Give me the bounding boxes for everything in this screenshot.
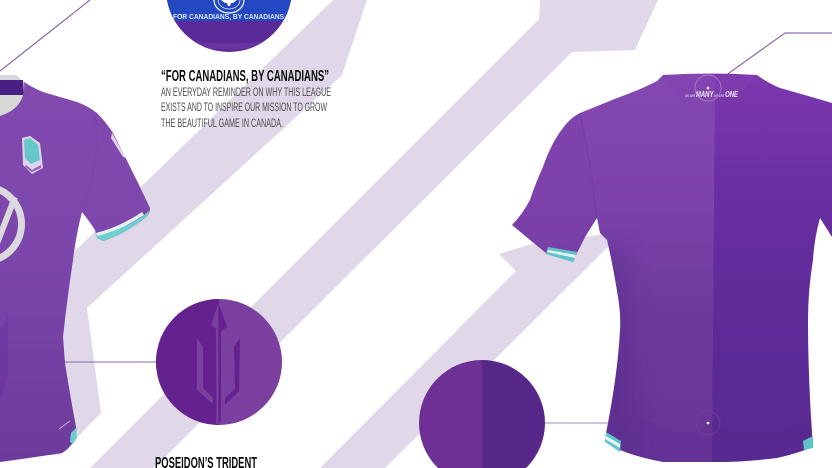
purple fabric [167,0,291,52]
left hem cuff [605,432,621,452]
left half [500,70,716,465]
background stripe: centre trident shaft [90,0,658,468]
body copy: EXISTS AND TO INSPIRE OUR MISSION TO GROW [161,100,327,114]
circle darker half [482,360,545,468]
left sleeve cuff white band [96,212,144,236]
sleeve seam [82,114,97,212]
right half [712,70,832,465]
sleeve stripe mark [111,133,126,158]
hem reflective mark [59,421,70,429]
collar yoke [663,75,757,97]
right hem cuff [803,436,813,450]
circle base [156,299,282,425]
left hem cuff [70,428,77,444]
sleeve shading [512,162,597,252]
maple leaf emblem [214,0,244,13]
trident icon left half [197,303,218,424]
text block: for Canadians [161,68,331,130]
hem shading [620,420,815,465]
background stripe: right trident tine [320,232,620,468]
background stripe: left trident tine [0,0,367,455]
stitched fabric band [194,42,264,50]
callout line: split colours [545,422,665,424]
collar inside [0,75,24,118]
blue label [167,0,291,21]
body copy: AN EVERYDAY REMINDER ON WHY THIS LEAGUE [161,85,331,99]
left jersey [0,75,150,462]
callout line: top left [0,0,90,71]
body copy: THE BEAUTIFUL GAME IN CANADA. [161,116,283,130]
callout line: trident [0,361,156,363]
trident watermark on jersey [0,316,8,402]
jersey fabric [500,70,832,465]
left sleeve cuff [96,211,149,241]
circle darker half [156,299,219,425]
neck tagline: WE ARE MANY WE ARE ONE [685,90,738,99]
heading: “FOR CANADIANS, BY CANADIANS” [161,68,329,85]
callout line: neck [722,33,832,78]
sleeve cuff [546,247,577,262]
detail circle: for Canadians label [167,0,291,52]
jersey body [0,82,150,462]
right jersey [500,70,832,465]
club crest [22,136,43,174]
detail circle: split colours [419,360,545,468]
hem marker ring [696,411,720,435]
circle lighter half [419,360,482,468]
detail circle: trident [156,299,282,425]
white sponsor ring logo [0,186,22,262]
neck marker dot [707,87,709,89]
side shading [606,247,632,454]
sleeve seam [580,113,597,218]
label text: FOR CANADIANS, BY CANADIANS. [173,12,286,21]
body copy [161,85,331,130]
hem marker dot [707,422,709,424]
trident icon right half [218,303,240,424]
neck marker ring [695,75,721,101]
